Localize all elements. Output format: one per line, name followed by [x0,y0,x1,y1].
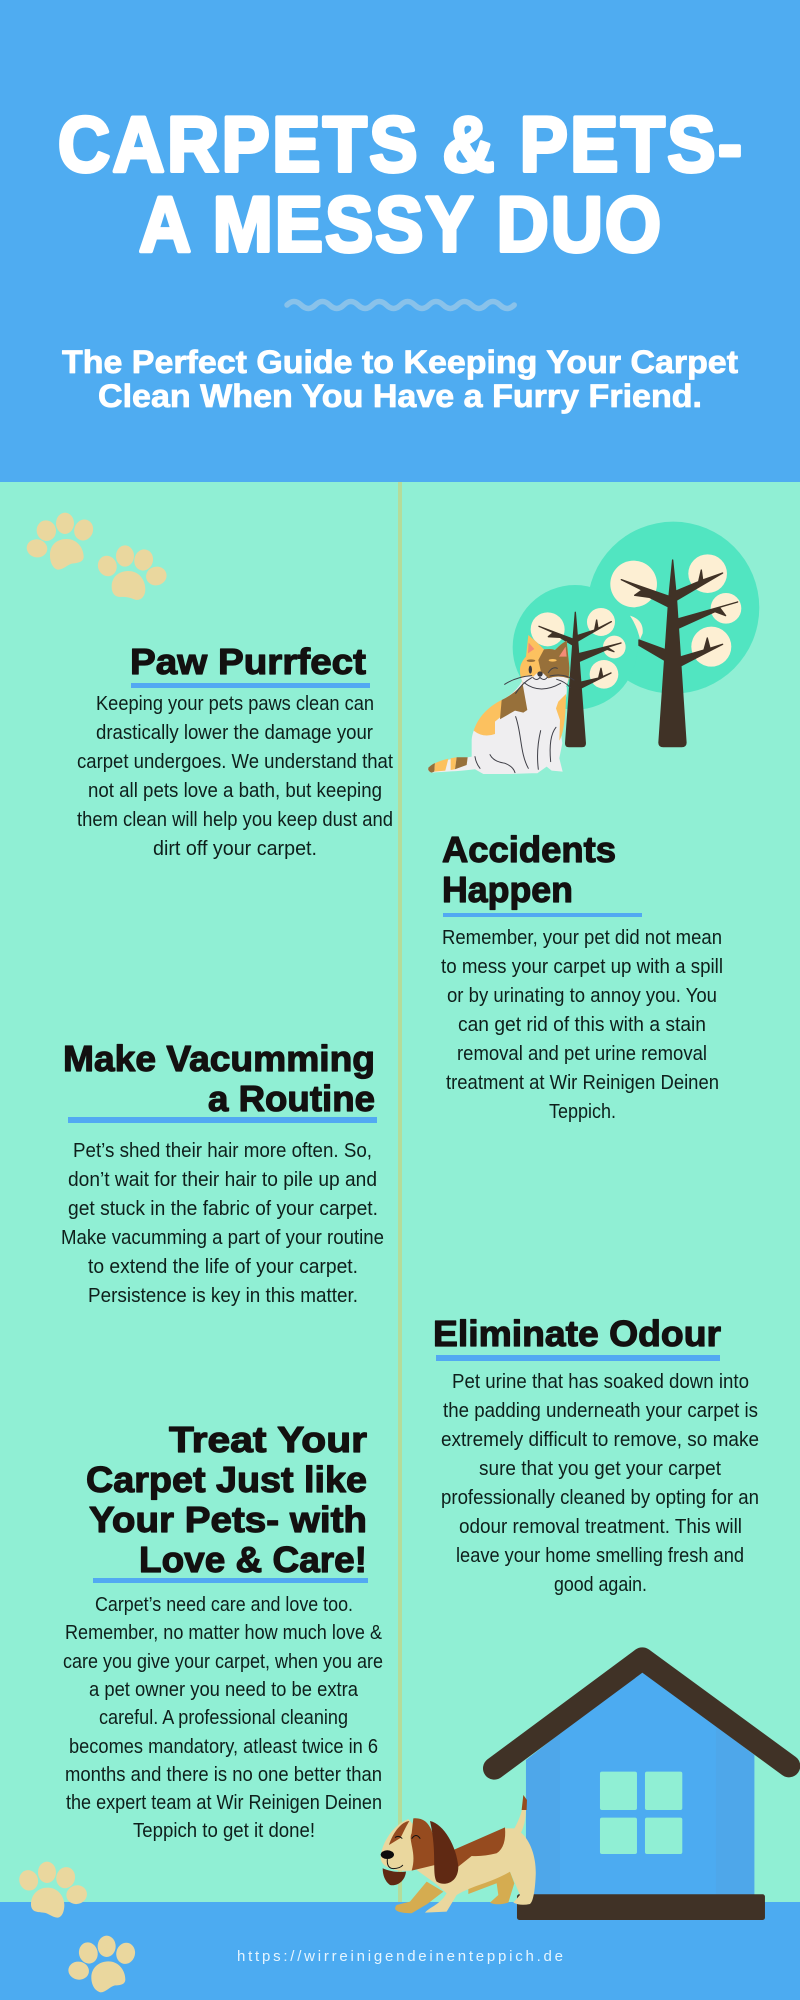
body text: Remember, no matter how much love & [65,1621,382,1644]
heading: accidents happen: Accidents [442,829,616,870]
heading: make vacumming a routine: a Routine [208,1078,375,1119]
body text: Pet urine that has soaked down into [452,1370,749,1393]
heading underline [443,913,642,917]
body text: to extend the life of your carpet. [88,1255,358,1278]
body text: get stuck in the fabric of your carpet. [68,1197,378,1220]
website url: https://wirreinigendeinenteppich.de [237,1948,563,1965]
heading: treat your carpet: Your Pets- with [89,1499,367,1540]
body text: odour removal treatment. This will [459,1515,742,1538]
body text [441,926,723,1123]
heading: treat your carpet: Love & Care! [139,1539,367,1580]
body text: Teppich to get it done! [133,1819,315,1842]
body text: removal and pet urine removal [457,1042,707,1065]
title: CARPETS & PETS- [58,100,742,188]
body text: a pet owner you need to be extra [89,1678,359,1701]
body text: dirt off your carpet. [153,837,317,860]
body text: Carpet’s need care and love too. [95,1593,353,1616]
body text: good again. [554,1573,647,1596]
illustration: calico cat [428,635,574,774]
body text: months and there is no one better than [65,1763,382,1786]
body text: Teppich. [549,1100,616,1123]
body text: to mess your carpet up with a spill [441,955,723,978]
title: A MESSY DUO [139,180,661,268]
subtitle: Clean When You Have a Furry Friend. [98,378,702,414]
heading: accidents happen: Happen [442,869,573,910]
heading underline [436,1355,720,1361]
body text: not all pets love a bath, but keeping [88,779,382,802]
heading: treat your carpet: Carpet Just like [86,1459,367,1500]
body text: them clean will help you keep dust and [77,808,393,831]
wavy divider [287,302,514,308]
panel: footer band [0,1902,800,2000]
house windows [600,1772,682,1854]
panel: treat your carpet [63,1419,383,1842]
body text: care you give your carpet, when you are [63,1650,383,1673]
heading underline [68,1117,377,1123]
illustration: trees [513,522,759,747]
subtitle [62,344,738,414]
body text: can get rid of this with a stain [458,1013,706,1036]
subtitle: The Perfect Guide to Keeping Your Carpet [62,344,738,380]
body text [61,1139,384,1307]
body text: leave your home smelling fresh and [456,1544,744,1567]
body text [63,1593,383,1842]
panel: header [0,0,800,482]
title [58,100,742,268]
heading underline [93,1578,368,1583]
body text: becomes mandatory, atleast twice in 6 [69,1735,378,1758]
panel: paw purrfect [77,641,393,860]
body text: drastically lower the damage your [96,721,373,744]
body text: Pet’s shed their hair more often. So, [73,1139,372,1162]
body text: or by urinating to annoy you. You [447,984,717,1007]
body text: the padding underneath your carpet is [443,1399,758,1422]
body text: professionally cleaned by opting for an [441,1486,759,1509]
icon: paw prints bottom left [16,1862,137,1992]
panel: accidents happen [441,829,723,1123]
body text: sure that you get your carpet [479,1457,721,1480]
panel: make vacumming a routine [61,1038,384,1307]
body text: careful. A professional cleaning [99,1706,348,1729]
body text [77,692,393,860]
body text: don’t wait for their hair to pile up and [68,1168,377,1191]
panel: eliminate odour [433,1313,759,1596]
heading: accidents happen [442,829,616,910]
body text: treatment at Wir Reinigen Deinen [446,1071,719,1094]
body text: carpet undergoes. We understand that [77,750,393,773]
heading: eliminate odour: Eliminate Odour [433,1313,721,1354]
heading underline [131,683,370,688]
heading: treat your carpet: Treat Your [169,1419,367,1460]
illustration: blue dog house [494,1659,789,1920]
heading: make vacumming a routine [63,1038,375,1119]
body text: Persistence is key in this matter. [88,1284,358,1307]
body text: extremely difficult to remove, so make [441,1428,759,1451]
heading: paw purrfect: Paw Purrfect [130,641,366,682]
body text: the expert team at Wir Reinigen Deinen [66,1791,382,1814]
body text: Make vacumming a part of your routine [61,1226,384,1249]
illustration: playful dog [381,1795,536,1913]
body text: Keeping your pets paws clean can [96,692,374,715]
icon: paw prints top left [25,513,169,600]
heading: make vacumming a routine: Make Vacumming [63,1038,375,1079]
heading: treat your carpet [86,1419,367,1580]
body text: Remember, your pet did not mean [442,926,722,949]
body text [441,1370,759,1596]
